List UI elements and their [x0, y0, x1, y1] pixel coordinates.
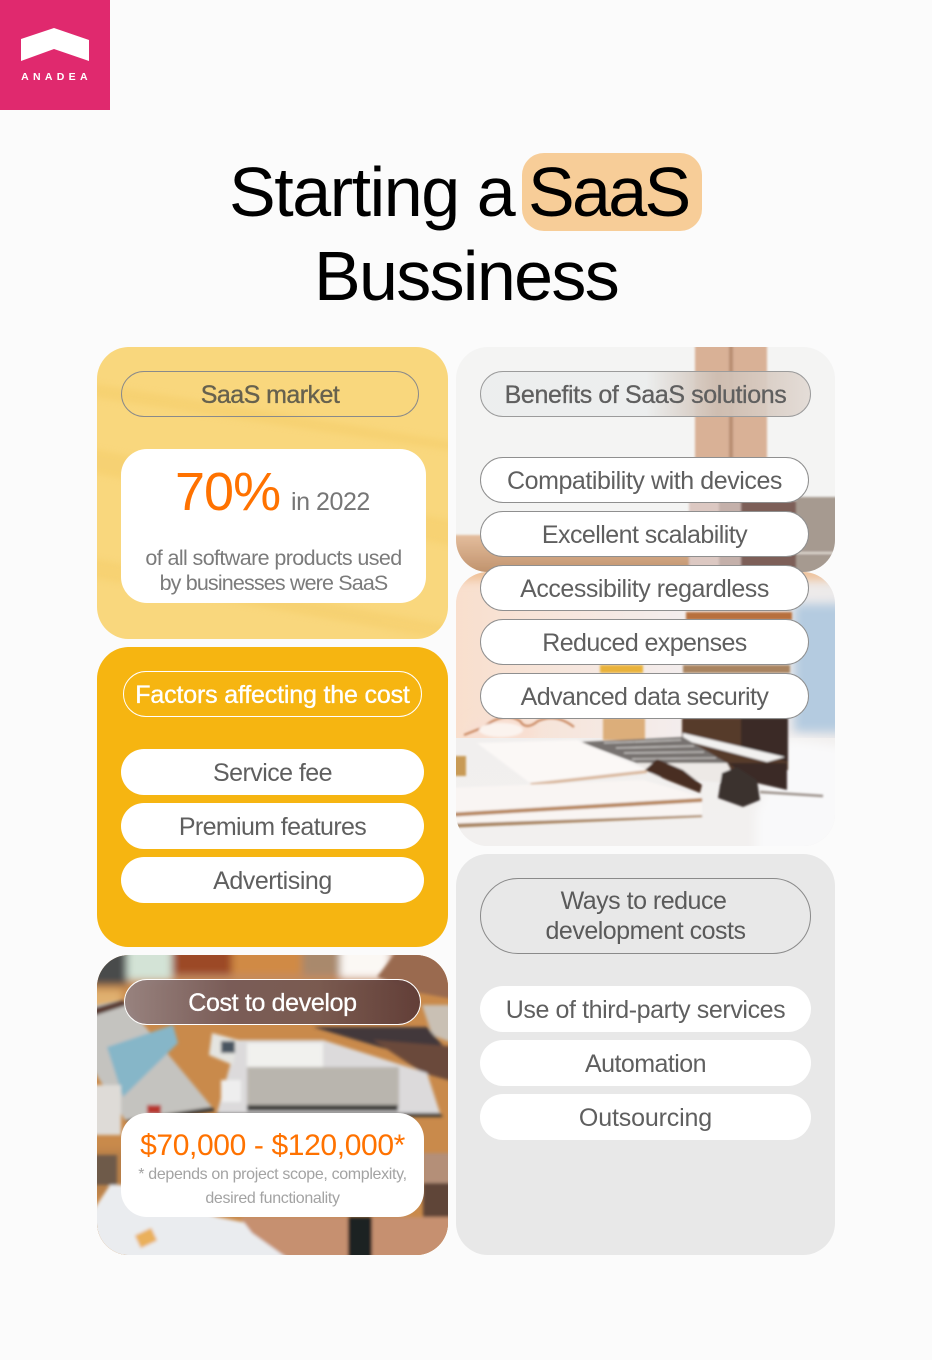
- item: Automation: [480, 1040, 811, 1086]
- item: Advanced data security: Advanced data security: [521, 682, 768, 710]
- item: Reduced expenses: [480, 619, 809, 665]
- title: [229, 153, 702, 315]
- item: Accessibility regardless: Accessibility regardless: [520, 574, 769, 602]
- stat description: of all software products used: [145, 546, 402, 570]
- item: Advertising: [121, 857, 424, 903]
- photo: bottom image with laptop and desk: [456, 572, 835, 846]
- price card: [121, 1113, 424, 1217]
- price footnote: * depends on project scope, complexity,: [138, 1166, 407, 1183]
- heading: Benefits of SaaS solutions: Benefits of SaaS solutions: [505, 380, 786, 408]
- panel: Factors affecting the cost: [97, 647, 448, 947]
- panel: Ways to reduce development costs: [456, 854, 835, 1255]
- item: Excellent scalability: Excellent scalability: [542, 520, 747, 548]
- panel: Benefits of SaaS solutions: [456, 347, 835, 846]
- heading: Ways to reduce development costs: Ways to reduce: [561, 887, 726, 915]
- title highlight: SaaS: [522, 153, 702, 231]
- heading: SaaS market: SaaS market: [201, 380, 339, 408]
- photo: desk with laptop and notebook: [97, 955, 448, 1255]
- photo: top image with window: [456, 347, 835, 572]
- heading: Factors affecting the cost: [123, 671, 422, 717]
- logo: [0, 0, 110, 110]
- stat card: [121, 449, 426, 603]
- price footnote: desired functionality: [205, 1190, 340, 1207]
- item: Use of third-party services: [480, 986, 811, 1032]
- heading: Factors affecting the cost: Factors affecting the cost: [135, 680, 410, 708]
- item: Outsourcing: [480, 1094, 811, 1140]
- heading: Benefits of SaaS solutions: [480, 371, 811, 417]
- item: Excellent scalability: [480, 511, 809, 557]
- item: Accessibility regardless: [480, 565, 809, 611]
- icon: logo chevron: [21, 28, 89, 61]
- heading: Cost to develop: Cost to develop: [188, 988, 357, 1016]
- item: Compatibility with devices: Compatibility with devices: [507, 466, 782, 494]
- title word: SaaS: SaaS: [528, 153, 688, 231]
- panel: Cost to develop: [97, 955, 448, 1255]
- heading: SaaS market: [121, 371, 419, 417]
- item: Compatibility with devices: [480, 457, 809, 503]
- price footnote: [138, 1166, 407, 1207]
- heading: Ways to reduce development costs: development costs: [546, 917, 745, 945]
- item: Advanced data security: [480, 673, 809, 719]
- title line 1: Starting a: [229, 153, 514, 231]
- price: $70,000 - $120,000*: $70,000 - $120,000*: [140, 1129, 405, 1162]
- stat description: [145, 546, 402, 595]
- item: Service fee: [121, 749, 424, 795]
- item: Reduced expenses: Reduced expenses: [542, 628, 747, 656]
- item: Service fee: Service fee: [213, 758, 332, 786]
- item: Advertising: Advertising: [213, 866, 332, 894]
- stat: 70%: 70%: [175, 462, 280, 522]
- item: Use of third-party services: Use of third-party services: [506, 996, 785, 1024]
- logo wordmark: ANADEA: [21, 71, 92, 83]
- title line 2: Bussiness: [314, 237, 618, 315]
- item: Outsourcing: Outsourcing: [579, 1104, 712, 1132]
- stat label: in 2022: in 2022: [291, 488, 370, 516]
- item: Automation: Automation: [585, 1050, 706, 1078]
- heading: Cost to develop: [124, 979, 421, 1025]
- heading: Ways to reduce development costs: [480, 878, 811, 954]
- item: Premium features: [121, 803, 424, 849]
- stat description: by businesses were SaaS: [160, 571, 387, 595]
- item: Premium features: Premium features: [179, 812, 366, 840]
- panel: SaaS market: [97, 347, 448, 639]
